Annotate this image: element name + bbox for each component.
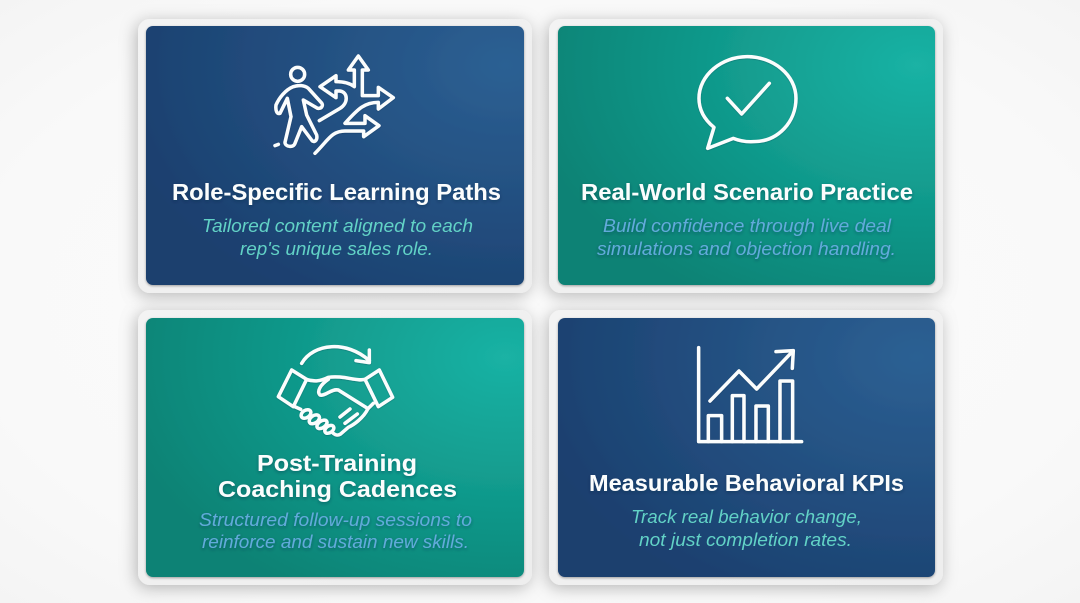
panel: measurable behavioral KPIs xyxy=(549,310,943,585)
icon: speech bubble with check mark xyxy=(699,57,796,148)
description: Build confidence through live deal xyxy=(603,216,892,236)
icon: person choosing between arrow paths xyxy=(275,56,393,153)
description: not just completion rates. xyxy=(639,530,852,550)
icon: rising bar chart with arrow xyxy=(699,348,802,442)
description xyxy=(631,507,862,550)
heading: Measurable Behavioral KPIs xyxy=(589,470,904,496)
description: simulations and objection handling. xyxy=(597,239,896,259)
panel: post-training coaching cadences xyxy=(138,310,532,585)
panel: real-world scenario practice xyxy=(549,19,943,293)
description: rep's unique sales role. xyxy=(240,239,433,259)
heading xyxy=(218,450,457,502)
description xyxy=(199,510,472,552)
description: reinforce and sustain new skills. xyxy=(202,532,469,552)
description xyxy=(597,216,896,259)
heading: Post-Training xyxy=(257,450,417,476)
panel: role-specific learning paths xyxy=(138,19,532,293)
heading: Coaching Cadences xyxy=(218,476,457,502)
description: Track real behavior change, xyxy=(631,507,862,527)
icon: handshake with circular arrow xyxy=(278,347,393,435)
heading: Role-Specific Learning Paths xyxy=(172,179,501,205)
description xyxy=(202,216,473,259)
description: Tailored content aligned to each xyxy=(202,216,473,236)
heading: Real-World Scenario Practice xyxy=(581,179,913,205)
description: Structured follow-up sessions to xyxy=(199,510,472,530)
